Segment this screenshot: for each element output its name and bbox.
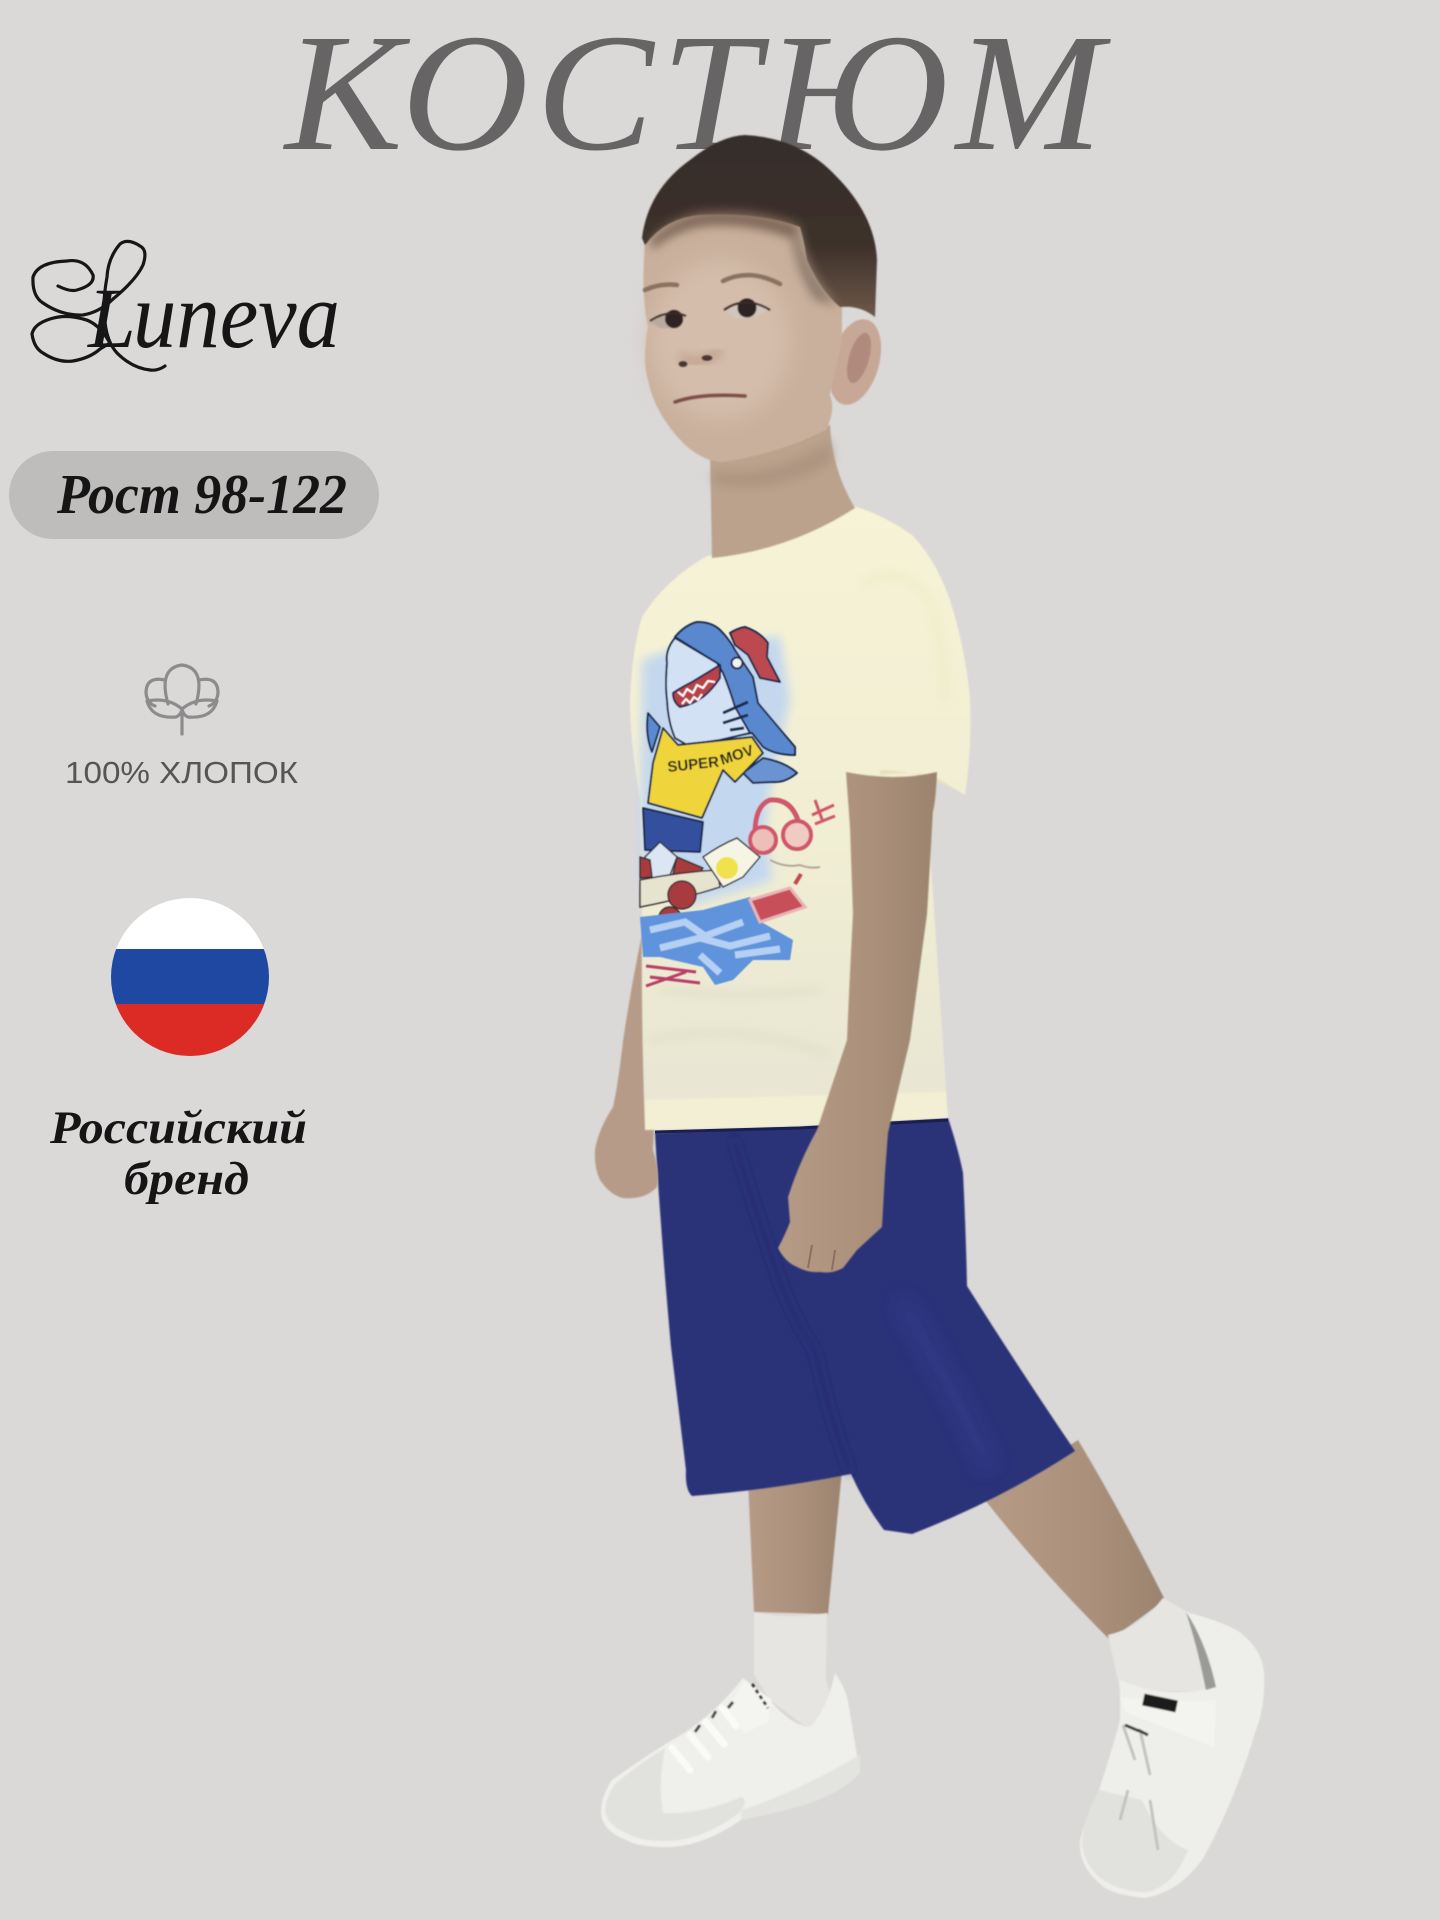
- brand caption: бренд: [124, 1153, 249, 1205]
- cotton block: [65, 665, 298, 790]
- hair fringe: [650, 211, 800, 250]
- right arm: [778, 772, 937, 1272]
- left arm: [595, 920, 660, 1198]
- facial features: [645, 275, 780, 402]
- badge text: Рост 98-122: [56, 464, 347, 526]
- back leg: [985, 1440, 1220, 1692]
- t-shirt print: skater shark: [640, 622, 835, 986]
- height badge: [9, 451, 379, 539]
- neck shadow: [714, 440, 832, 487]
- brand caption: Российский: [49, 1102, 307, 1154]
- hair: [642, 135, 877, 317]
- print: headphones: [750, 800, 835, 884]
- ear: [820, 313, 890, 411]
- badge pill: [9, 451, 379, 539]
- logo: Luneva: [32, 241, 340, 370]
- cotton label: 100% ХЛОПОК: [65, 755, 298, 790]
- print: skateboard: [640, 838, 760, 929]
- icon: cotton: [146, 665, 218, 734]
- print: graffiti: [640, 897, 793, 986]
- boy figure: [595, 135, 1264, 1898]
- front leg: [748, 1470, 842, 1730]
- shorts: [655, 1118, 1075, 1534]
- print: shirt lettering: SUPER: [667, 754, 720, 776]
- neck: [710, 425, 855, 558]
- face highlight: [650, 260, 790, 420]
- logo flourish: [32, 241, 165, 370]
- face: [643, 175, 842, 462]
- print: shirt lettering: [667, 742, 756, 776]
- hair fade: [792, 232, 838, 306]
- print: sky wash: [640, 636, 790, 905]
- finger gaps: [808, 1245, 835, 1270]
- icon: russian flag: [111, 898, 269, 1056]
- logo wordmark: uneva: [133, 264, 340, 368]
- print: shark: [643, 622, 797, 852]
- print: shirt lettering: MOV: [718, 742, 756, 769]
- shirt hem shadow: [655, 1120, 948, 1132]
- logo wordmark: L: [86, 270, 136, 366]
- back sneaker: [1080, 1612, 1264, 1898]
- front sneaker: [601, 1673, 860, 1847]
- print: cassette: [750, 888, 805, 922]
- t-shirt: [630, 506, 970, 1130]
- title: КОСТЮМ: [282, 1, 1112, 186]
- russian brand block: [49, 890, 307, 1205]
